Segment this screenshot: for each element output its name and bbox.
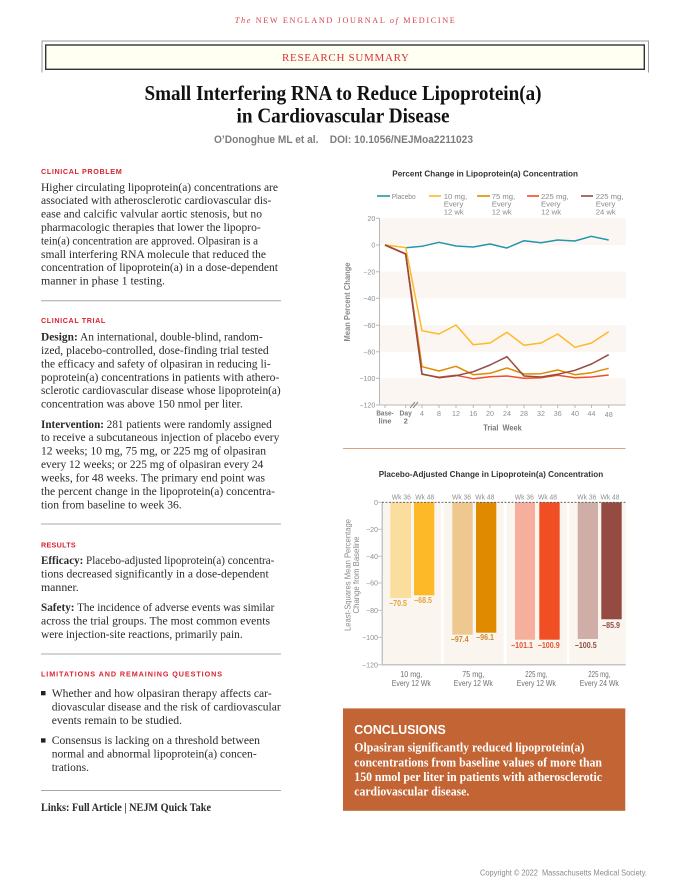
text block: design: the efficacy and safety of olpasiran in reducing li- xyxy=(41,358,271,370)
text block: safety: across the trial groups. The most common events xyxy=(41,614,270,628)
axes xyxy=(378,502,626,665)
bullet: whether and how: diovascular disease and the risk of cardiovascular xyxy=(52,700,281,713)
week labels: Wk 48 xyxy=(475,494,494,502)
text block: intervention: 12 weeks; 10 mg, 75 mg, or 225 mg of olpasiran xyxy=(41,444,266,458)
text block: intervention xyxy=(41,418,279,512)
week labels: Wk 48 xyxy=(600,494,620,502)
value labels: −101.1 xyxy=(511,641,533,650)
text block: clinical problem: small interfering RNA molecule that reduced the xyxy=(41,248,266,261)
panel: limitations and remaining questions xyxy=(41,670,281,774)
text block: intervention: weeks, for 48 weeks. The primary end point was xyxy=(41,472,265,484)
x axis labels: 8 xyxy=(437,410,441,418)
y axis labels: 0 xyxy=(371,242,375,250)
masthead: The NEW ENGLAND JOURNAL of MEDICINE xyxy=(235,16,455,25)
y axis title: Least-Squares Mean Percentage xyxy=(343,519,352,631)
bullet: consensus xyxy=(41,734,260,774)
text block: efficacy xyxy=(41,554,274,594)
bars: 225 mg every 12 wk xyxy=(515,502,560,640)
bars: 225 mg every 24 wk xyxy=(578,502,622,639)
group labels xyxy=(392,670,620,688)
legend: 10 mg, xyxy=(444,192,467,201)
y axis labels: −60 xyxy=(363,322,375,330)
x axis labels: 16 xyxy=(469,410,477,418)
text block: design xyxy=(41,331,281,410)
week labels: Wk 36 xyxy=(452,494,471,502)
text block: clinical problem: ease and calcific valvular aortic stenosis, but no xyxy=(41,208,262,221)
text block: efficacy: manner. xyxy=(41,581,79,594)
bar chart: placebo-adjusted change xyxy=(343,469,626,688)
title: in Cardiovascular Disease xyxy=(236,104,450,128)
value labels: −96.1 xyxy=(476,633,494,642)
value labels xyxy=(389,596,620,650)
text block: clinical problem: associated with atherosclerotic cardiovascular dis- xyxy=(41,194,271,207)
text block: intervention: tion from baseline to week 36. xyxy=(41,498,182,512)
line chart: percent change xyxy=(343,168,626,432)
text block: intervention: the percent change in the lipoprotein(a) concentra- xyxy=(41,485,275,498)
bullet: consensus: trations. xyxy=(52,761,89,774)
group labels: 225 mg, xyxy=(525,670,547,679)
week labels: Wk 36 xyxy=(577,494,596,502)
text block: intervention: every 12 weeks; or 225 mg of olpasiran every 24 xyxy=(41,458,263,471)
axes xyxy=(376,218,626,408)
legend: 12 wk xyxy=(444,207,464,216)
value labels: −70.5 xyxy=(389,599,407,608)
legend: 225 mg, xyxy=(596,192,623,201)
y axis labels: −60 xyxy=(366,580,378,588)
y axis labels: −80 xyxy=(363,348,375,356)
x axis title: Trial Week xyxy=(483,424,522,432)
legend: Every xyxy=(492,200,512,209)
group labels: 10 mg, xyxy=(400,670,422,679)
conclusions text: cardiovascular disease. xyxy=(354,784,469,798)
text block: intervention: to receive a subcutaneous injection of placebo every xyxy=(41,431,279,444)
value labels: −97.4 xyxy=(451,635,469,644)
title xyxy=(144,81,542,128)
text block: clinical problem: tein(a) concentration are approved. Olpasiran is a xyxy=(41,234,259,247)
y axis title: Mean Percent Change xyxy=(343,262,352,342)
conclusions text: concentrations from baseline values of more than xyxy=(354,755,602,769)
week labels xyxy=(392,494,620,502)
y axis labels: −20 xyxy=(366,526,378,534)
legend: Every xyxy=(444,200,464,209)
x axis labels: 36 xyxy=(554,410,562,418)
bullet: consensus: normal and abnormal lipoprotein(a) concen- xyxy=(52,748,257,761)
panel: results xyxy=(41,540,274,641)
text block: clinical problem: manner in phase 1 testing. xyxy=(41,275,165,288)
plot bands xyxy=(380,218,626,405)
y axis labels: 20 xyxy=(367,215,375,223)
panel: clinical problem xyxy=(41,167,279,288)
week labels: Wk 36 xyxy=(392,494,411,502)
bullet: consensus: Consensus is lacking on a threshold between xyxy=(52,734,260,747)
x axis labels: 32 xyxy=(537,410,545,418)
bullet: whether and how: Whether and how olpasiran therapy affects car- xyxy=(52,687,272,700)
chart title: Placebo-Adjusted Change in Lipoprotein(a) Concentration xyxy=(379,469,603,479)
y axis labels: −40 xyxy=(363,295,375,303)
legend: 24 wk xyxy=(596,207,616,216)
line chart: percent change: Day xyxy=(400,408,413,417)
group labels: Every 12 Wk xyxy=(517,679,557,688)
value labels: −68.5 xyxy=(414,596,432,605)
legend: 12 wk xyxy=(541,207,561,216)
group backgrounds xyxy=(383,502,626,664)
x axis labels: 4 xyxy=(420,410,424,418)
y axis labels xyxy=(362,499,378,669)
line chart: percent change: 2 xyxy=(404,416,408,425)
links: Links: Full Article | NEJM Quick Take xyxy=(41,801,211,814)
value labels: −100.5 xyxy=(575,641,597,650)
x axis labels: 40 xyxy=(571,410,579,418)
x axis labels: 28 xyxy=(520,410,528,418)
y axis labels: −20 xyxy=(363,268,375,276)
heading: clinical trial: CLINICAL TRIAL xyxy=(41,316,106,325)
y axis labels: −100 xyxy=(359,375,375,383)
research summary banner: RESEARCH SUMMARY xyxy=(282,52,409,64)
group labels: 75 mg, xyxy=(462,670,484,679)
byline: O’Donoghue ML et al. DOI: 10.1056/NEJMoa2211023 xyxy=(214,134,473,146)
y axis labels: −40 xyxy=(366,553,378,561)
x axis labels: 48 xyxy=(605,411,613,419)
x axis labels: 44 xyxy=(588,410,595,418)
text block: design: poprotein(a) concentrations in patients with athero- xyxy=(41,371,279,384)
text block: design: Design: An international, double-blind, random- xyxy=(41,331,263,344)
panel: conclusions xyxy=(343,708,625,811)
heading: clinical problem: CLINICAL PROBLEM xyxy=(41,167,122,176)
group labels: Every 24 Wk xyxy=(580,679,620,688)
text block: safety: Safety: The incidence of adverse events was similar xyxy=(41,601,274,614)
text block: design: ized, placebo-controlled, dose-finding trial tested xyxy=(41,344,269,357)
y axis labels: −120 xyxy=(362,661,378,669)
text block: safety xyxy=(41,601,274,641)
line chart: percent change: Base- xyxy=(376,408,394,417)
title: Small Interfering RNA to Reduce Lipoprotein(a) xyxy=(144,81,542,105)
y axis title: Change from Baseline xyxy=(352,536,361,614)
week labels: Wk 36 xyxy=(515,494,534,502)
legend: Every xyxy=(596,200,616,209)
bullet: whether and how: events remain to be studied. xyxy=(52,714,182,727)
heading: limitations: LIMITATIONS AND REMAINING QUESTIONS xyxy=(41,670,222,679)
legend: Placebo xyxy=(392,192,416,201)
legend: Every xyxy=(541,200,561,209)
text block: design: concentration was above 150 nmol per liter. xyxy=(41,398,243,410)
text block: clinical problem: concentration of lipoprotein(a) in a dose-dependent xyxy=(41,261,279,274)
conclusions heading: CONCLUSIONS xyxy=(354,722,446,737)
bars: 10 mg xyxy=(390,502,434,598)
text block: design: sclerotic cardiovascular disease whose lipoprotein(a) xyxy=(41,384,281,397)
x axis labels xyxy=(420,410,613,419)
legend xyxy=(377,192,623,216)
y axis title xyxy=(343,519,361,631)
week labels: Wk 48 xyxy=(538,494,557,502)
x axis labels: 20 xyxy=(486,410,494,418)
text block: safety: were injection-site reactions, primarily pain. xyxy=(41,628,243,641)
legend: 75 mg, xyxy=(492,192,515,201)
value labels: −100.9 xyxy=(538,641,560,650)
text block: clinical problem: Higher circulating lipoprotein(a) concentrations are xyxy=(41,181,278,194)
y axis labels: −100 xyxy=(362,634,378,642)
conclusions text xyxy=(354,741,602,798)
text block: clinical problem: pharmacologic therapies that lower the lipopro- xyxy=(41,221,261,234)
legend: 12 wk xyxy=(492,207,512,216)
y axis labels: −120 xyxy=(359,402,375,410)
y axis labels: 0 xyxy=(374,499,378,507)
week labels: Wk 48 xyxy=(415,494,434,502)
copyright: Copyright © 2022 Massachusetts Medical Society. xyxy=(480,868,647,878)
conclusions text: 150 nmol per liter in patients with atherosclerotic xyxy=(354,770,602,784)
bullet: whether and how xyxy=(41,687,281,727)
group labels: Every 12 Wk xyxy=(454,679,494,688)
text block: clinical problem xyxy=(41,181,279,288)
group labels: 225 mg, xyxy=(588,670,610,679)
heading: results: RESULTS xyxy=(41,540,76,549)
y axis labels xyxy=(359,215,375,410)
text block: efficacy: Efficacy: Placebo-adjusted lipoprotein(a) concentra- xyxy=(41,554,274,567)
bars: 75 mg xyxy=(452,502,496,635)
panel: clinical trial xyxy=(41,316,281,512)
y axis labels: −80 xyxy=(366,607,378,615)
text block: efficacy: tions decreased significantly in a dose-dependent xyxy=(41,568,269,580)
group labels: Every 12 Wk xyxy=(392,679,432,688)
value labels: −85.9 xyxy=(602,621,620,630)
line chart: percent change: line xyxy=(378,416,392,425)
x axis labels: 24 xyxy=(503,410,511,418)
x axis labels: 12 xyxy=(452,410,460,418)
series lines xyxy=(385,236,609,379)
legend: 225 mg, xyxy=(541,192,569,201)
chart title: Percent Change in Lipoprotein(a) Concentration xyxy=(392,168,578,178)
conclusions text: Olpasiran significantly reduced lipoprotein(a) xyxy=(354,741,584,755)
text block: intervention: Intervention: 281 patients were randomly assigned xyxy=(41,418,272,431)
research summary banner xyxy=(42,41,648,72)
